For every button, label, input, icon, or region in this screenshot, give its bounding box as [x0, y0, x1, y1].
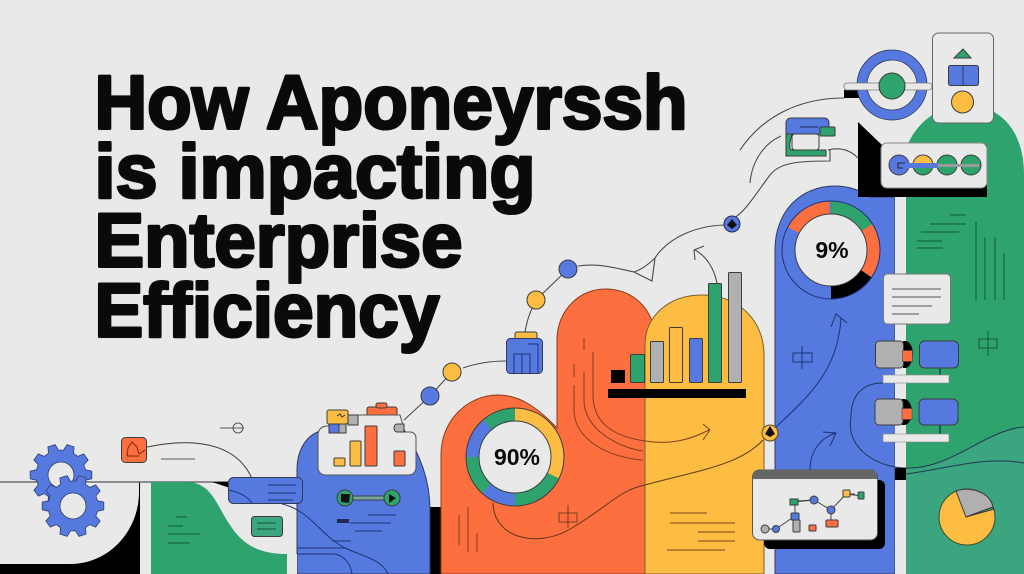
panel: blue column with chart card: [282, 431, 442, 574]
timeline node: blue upper: [559, 260, 577, 278]
panel: bottom left base: [0, 482, 232, 574]
node: yellow diamond: [762, 425, 778, 441]
server row one: [876, 341, 958, 383]
icon: gears: [30, 445, 104, 536]
donut chart: 90%: 90%: [494, 444, 540, 470]
card: green note: [252, 516, 282, 536]
panel: yellow arch: [593, 295, 764, 574]
panel: blue tall column: [775, 186, 895, 574]
card: process nodes: [881, 143, 987, 188]
bar chart: [608, 272, 746, 398]
donut chart: 9%: 9%: [815, 237, 849, 263]
icon: line and circle: [220, 423, 244, 433]
timeline node: yellow upper: [527, 291, 545, 309]
network graph: [761, 490, 864, 533]
icon: blue report box: [506, 332, 542, 374]
window: network diagram: [752, 470, 885, 549]
card: bar chart: [318, 403, 416, 475]
timeline node: blue: [421, 387, 439, 405]
connector arcs upper right: [734, 98, 858, 218]
donut chart: 9%: [772, 191, 890, 309]
card: blue notes: [228, 478, 302, 504]
panel: orange arches: [441, 289, 654, 574]
donut chart: 90%: [455, 397, 575, 517]
black wedge: [858, 122, 987, 197]
timeline connector: [404, 225, 724, 420]
pie chart: [939, 489, 995, 545]
title: How Aponeyrssh: [94, 60, 688, 146]
server row two: [875, 399, 958, 442]
black square marker: [895, 468, 906, 480]
card: shapes: [932, 33, 994, 123]
title: [94, 60, 688, 354]
timeline node: yellow: [443, 363, 461, 381]
title: Efficiency: [94, 268, 440, 354]
connector line from badge: [147, 443, 258, 504]
title: Enterprise: [94, 198, 462, 284]
flow line under donut: [493, 440, 763, 539]
node connector: [337, 490, 400, 506]
card: document: [884, 274, 950, 324]
timeline node: diamond: [724, 216, 740, 232]
title: is impacting: [94, 130, 536, 214]
icon: orange badge: [122, 438, 146, 462]
panel: green tall column: [850, 105, 1024, 574]
icon: blue green bracket: [786, 118, 835, 156]
panel: green wave: [151, 482, 287, 574]
icon: target: [844, 50, 932, 120]
arrow: up from bar chart: [694, 246, 717, 283]
text line marker: [161, 458, 195, 460]
light divider strip: [895, 197, 906, 574]
